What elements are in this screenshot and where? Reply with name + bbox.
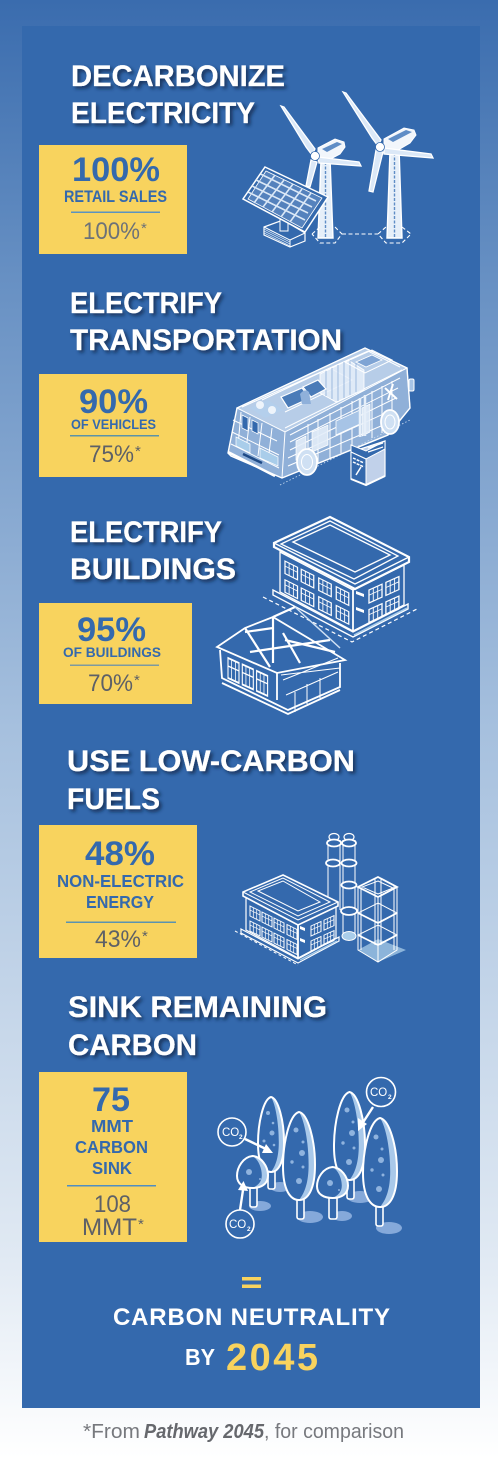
footnote: , for comparison xyxy=(264,1421,404,1443)
turbine left xyxy=(318,158,333,238)
section: electrify buildings xyxy=(39,516,417,714)
solar panel xyxy=(243,167,328,232)
tree trunks xyxy=(250,1168,383,1226)
icon: electric bus and charger xyxy=(228,348,414,485)
tall tree B xyxy=(283,1112,315,1200)
CO2 bubble right: CO xyxy=(370,1087,387,1099)
stat box: 48% non-electric energy: 48% xyxy=(85,835,155,873)
section: electrify transportation xyxy=(39,287,414,485)
stat box: 48% non-electric energy: NON-ELECTRIC xyxy=(57,871,184,891)
bus ground outline xyxy=(280,420,410,485)
stat box: 95% of buildings: 70% xyxy=(88,670,133,697)
heading: electrify transportation xyxy=(70,287,342,357)
stat box: 100% retail sales: 100% xyxy=(83,218,140,245)
dashed footprint xyxy=(263,597,417,642)
stat box: 90% of vehicles: 90% xyxy=(79,383,148,421)
heading: use low-carbon fuels: USE LOW-CARBON xyxy=(67,745,355,778)
bus side panels xyxy=(288,378,400,468)
stat box: 48% non-electric energy: ENERGY xyxy=(86,892,154,912)
heading: electrify buildings: ELECTRIFY xyxy=(70,516,222,549)
heading: sink remaining carbon: CARBON xyxy=(68,1029,197,1062)
bus body xyxy=(228,348,410,478)
stat box: 100% retail sales: RETAIL SALES xyxy=(64,187,167,206)
solar stand xyxy=(264,220,305,247)
stat box: 48% non-electric energy: 43% xyxy=(95,926,141,953)
icon: industrial plant xyxy=(235,834,406,965)
tall tree A xyxy=(258,1097,284,1172)
footnote: Pathway 2045 xyxy=(144,1421,265,1443)
building base xyxy=(273,590,408,637)
year 2045: 2045 xyxy=(226,1337,318,1379)
stat box: 75 MMT carbon sink: 75 xyxy=(92,1081,130,1119)
turbine right xyxy=(387,148,402,238)
bus wheels xyxy=(297,410,399,475)
stat box: 75 MMT carbon sink: * xyxy=(138,1216,144,1233)
heading: electrify transportation: ELECTRIFY xyxy=(70,287,222,320)
CO2 bubble right xyxy=(366,1078,396,1106)
stat box: 90% of vehicles: * xyxy=(135,443,141,460)
icon: apartment building xyxy=(263,517,417,642)
stat box: 90% of vehicles: OF VEHICLES xyxy=(71,416,156,432)
small tree F xyxy=(317,1167,348,1198)
bus front face xyxy=(231,412,279,468)
CO2 bubble bottom xyxy=(226,1210,254,1238)
charger xyxy=(351,441,385,485)
heading: sink remaining carbon: SINK REMAINING xyxy=(68,991,327,1024)
chimneys xyxy=(326,834,357,940)
heading: electrify transportation: TRANSPORTATION xyxy=(70,324,342,357)
scaffold structure xyxy=(358,877,406,962)
CO2 bubble left xyxy=(218,1118,246,1146)
heading: electrify buildings: BUILDINGS xyxy=(70,553,236,586)
bus roof xyxy=(237,348,407,432)
house walls xyxy=(220,650,340,714)
heading: sink remaining carbon xyxy=(68,991,327,1062)
building body xyxy=(280,552,404,631)
tall tree C xyxy=(334,1092,365,1180)
factory roof xyxy=(243,875,338,925)
tree dots xyxy=(246,1108,384,1192)
stat box: 48% non-electric energy: * xyxy=(142,928,148,945)
factory windows xyxy=(250,906,297,954)
arrows to trees xyxy=(240,1107,373,1210)
icon: trees absorbing CO2 xyxy=(218,1078,402,1238)
footnote xyxy=(83,1421,404,1443)
stat box: 75 MMT carbon sink: MMT xyxy=(82,1214,137,1241)
icon: house frame xyxy=(217,607,345,714)
section: decarbonize electricity xyxy=(39,60,433,254)
by label: BY xyxy=(185,1344,215,1370)
stat box: 95% of buildings xyxy=(39,603,192,704)
CO2 bubble left: 2 xyxy=(239,1134,243,1141)
CO2 bubble bottom: CO xyxy=(229,1219,246,1231)
heading: decarbonize electricity xyxy=(71,60,285,130)
house windows xyxy=(228,658,268,696)
tree shadows xyxy=(249,1182,402,1234)
CO2 bubble left: CO xyxy=(222,1127,239,1139)
small tree E xyxy=(237,1156,268,1188)
stat box: 75 MMT carbon sink: CARBON xyxy=(75,1137,148,1157)
CO2 bubble right: 2 xyxy=(388,1094,392,1101)
section: low-carbon fuels xyxy=(39,745,406,965)
footnote: *From xyxy=(83,1421,140,1443)
bus mirror xyxy=(409,379,414,391)
icon: wind turbines and solar panel xyxy=(243,92,433,247)
stat box: 95% of buildings: OF BUILDINGS xyxy=(63,644,161,660)
stat box: 48% non-electric energy xyxy=(39,825,197,958)
stat box: 95% of buildings: 95% xyxy=(77,611,146,649)
house roof frame xyxy=(217,617,345,673)
heading: decarbonize electricity: ELECTRICITY xyxy=(71,97,255,130)
conclusion: carbon neutrality by 2045 xyxy=(113,1277,390,1379)
factory body xyxy=(246,895,336,958)
stat box: 75 MMT carbon sink: SINK xyxy=(92,1158,132,1178)
stat box: 75 MMT carbon sink: 108 xyxy=(94,1191,131,1218)
tall tree D xyxy=(363,1118,397,1207)
building roof xyxy=(274,517,409,589)
section: sink remaining carbon xyxy=(39,991,402,1242)
stat box: 100% retail sales: 100% xyxy=(72,151,160,189)
equals sign xyxy=(242,1277,261,1288)
heading: use low-carbon fuels: FUELS xyxy=(67,783,160,816)
building windows xyxy=(285,561,349,624)
carbon neutrality text: CARBON NEUTRALITY xyxy=(113,1304,390,1331)
stat box: 90% of vehicles xyxy=(39,374,187,477)
stat box: 75 MMT carbon sink: MMT xyxy=(91,1116,133,1136)
heading: decarbonize electricity: DECARBONIZE xyxy=(71,60,285,93)
dashed base path xyxy=(312,227,411,243)
stat box: 95% of buildings: * xyxy=(134,672,140,689)
heading: electrify buildings xyxy=(70,516,236,586)
bus windows xyxy=(281,380,326,408)
stat box: 100% retail sales xyxy=(39,145,187,254)
stat box: 75 MMT carbon sink xyxy=(39,1072,187,1242)
CO2 bubble bottom: 2 xyxy=(247,1226,251,1233)
stat box: 100% retail sales: * xyxy=(141,220,147,237)
heading: use low-carbon fuels xyxy=(67,745,355,816)
factory base xyxy=(241,929,339,963)
factory dashed footprint xyxy=(235,931,298,965)
stat box: 90% of vehicles: 75% xyxy=(89,441,134,468)
